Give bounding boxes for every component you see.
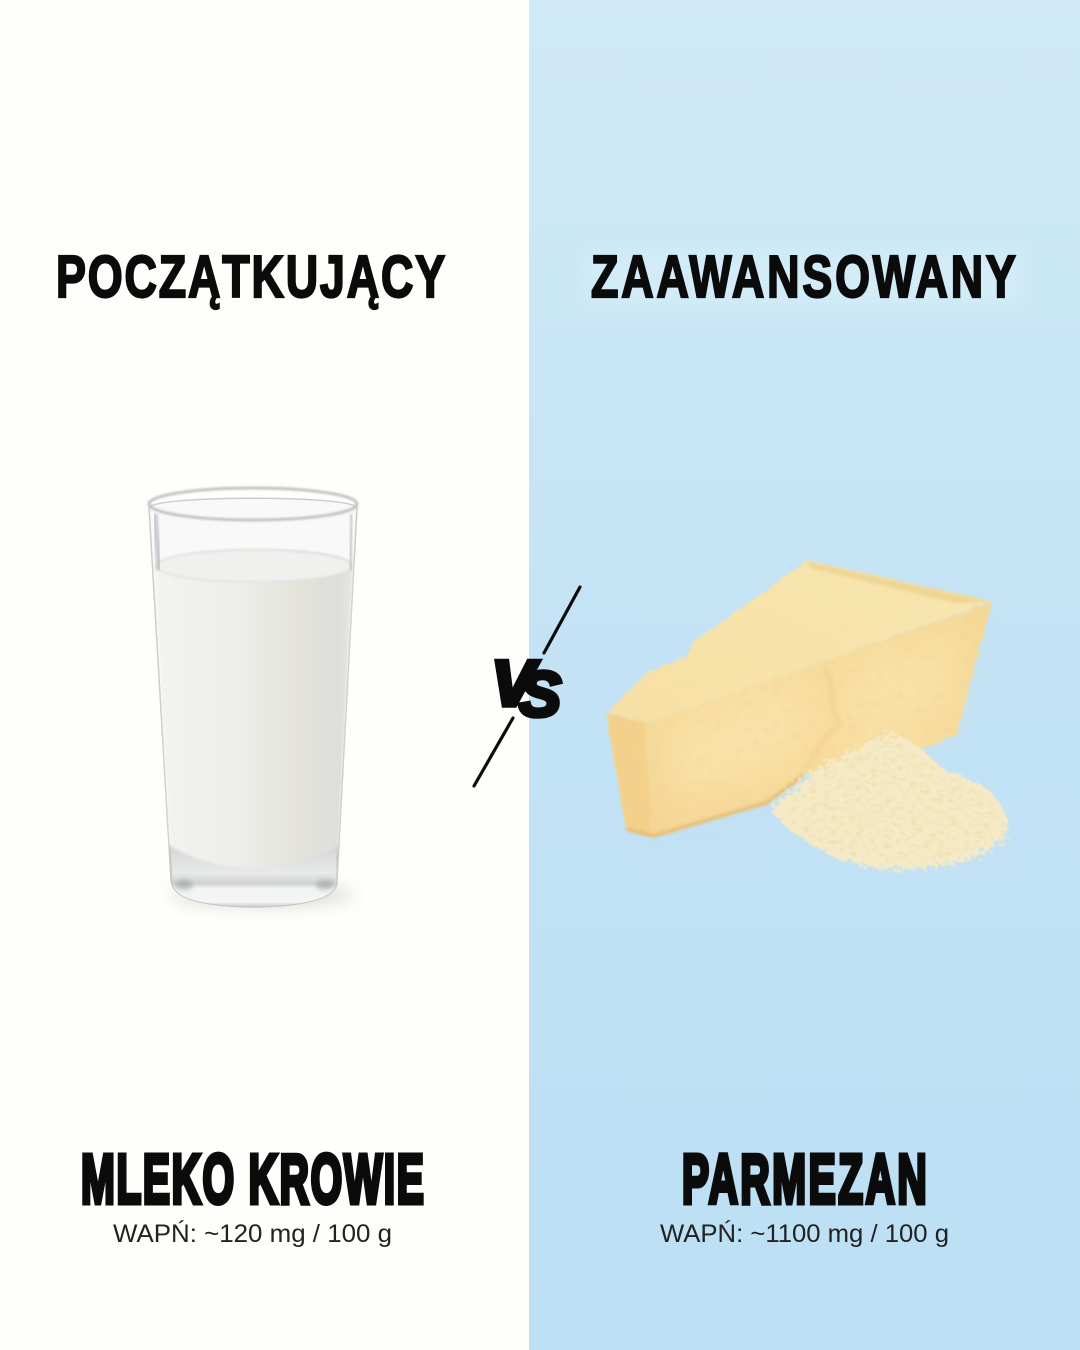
- cheese texture: [610, 605, 988, 833]
- product name: mleko krowie: MLEKO KROWIE: [81, 1141, 424, 1219]
- grated pile: [774, 733, 1007, 869]
- illustration: parmesan wedge and grated pile: [607, 561, 1007, 869]
- heading: początkujący: POCZĄTKUJĄCY: [56, 245, 445, 311]
- grated pile texture: [785, 740, 999, 862]
- milk: [155, 549, 353, 868]
- glass left wall: [155, 514, 159, 570]
- background: left panel: [0, 0, 529, 1350]
- milk surface: [156, 550, 352, 582]
- cheese top face: [607, 561, 992, 724]
- vs letter s: S: [519, 660, 561, 730]
- background: right panel: [529, 0, 1080, 1350]
- cheese highlight left panel: [667, 683, 803, 807]
- glass rim: [149, 488, 357, 520]
- cheese highlight right panel: [850, 630, 963, 737]
- cheese fracture: [807, 668, 840, 770]
- glass base: [170, 845, 337, 907]
- vs badge: [474, 587, 580, 786]
- calcium value: parmesan: WAPŃ: ~1100 mg / 100 g: [660, 1219, 949, 1248]
- vs slash upper: [544, 587, 580, 653]
- vs slash lower: [474, 718, 513, 786]
- cheese left face shading: [607, 714, 652, 835]
- illustration: glass of milk: [149, 488, 357, 907]
- product name: parmezan: PARMEZAN: [682, 1141, 927, 1219]
- glass base right corner: [316, 880, 334, 890]
- calcium value: milk: WAPŃ: ~120 mg / 100 g: [113, 1219, 392, 1248]
- cheese front face: [607, 602, 992, 837]
- glass right wall: [350, 514, 352, 570]
- glass shadow: [170, 884, 354, 906]
- glass body: [149, 498, 357, 907]
- cheese bottom edge: [627, 775, 803, 836]
- heading: zaawansowany: ZAAWANSOWANY: [591, 245, 1016, 311]
- cheese rind edge: [807, 561, 991, 603]
- vs letter v: V: [492, 649, 539, 719]
- glass base left corner: [175, 880, 193, 890]
